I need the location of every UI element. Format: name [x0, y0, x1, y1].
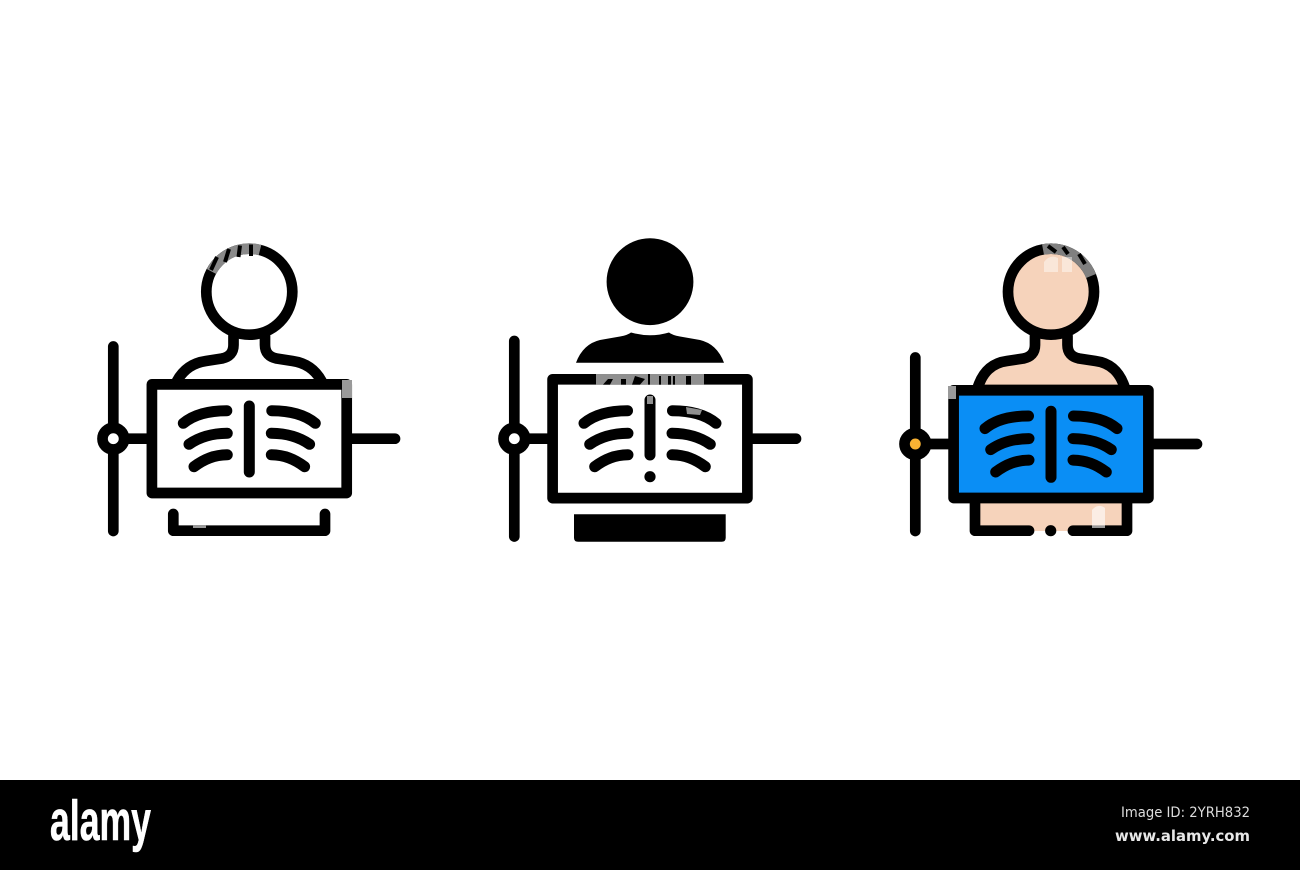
x-ray screen [954, 390, 1148, 498]
vertical stand pole [108, 346, 119, 531]
ribs and spine [183, 406, 315, 472]
icon: coloured x-ray patient [904, 246, 1197, 536]
lower body bracket [173, 514, 325, 531]
website: www.alamy.com [1115, 827, 1250, 845]
head silhouette [607, 238, 693, 325]
watermark fragments [193, 244, 352, 528]
vertical stand pole [509, 341, 520, 536]
stand connector arms [525, 433, 796, 444]
shoulders and neck [977, 336, 1126, 390]
ribs and spine [985, 411, 1117, 477]
alamy logo: alamy [50, 789, 151, 853]
shoulders silhouette [576, 332, 724, 363]
lower body block [574, 514, 726, 542]
shoulders outline [177, 336, 322, 381]
x-ray screen [553, 379, 747, 498]
ribs and spine [584, 400, 716, 467]
stand joint [102, 428, 124, 450]
footer bar [0, 780, 1300, 870]
vertical stand pole [910, 358, 921, 531]
stand connector arms [124, 433, 395, 444]
lower body outline [975, 503, 1127, 531]
lower body fill [975, 500, 1127, 531]
watermark fragments [596, 374, 704, 415]
icon: outline x-ray patient [102, 244, 395, 531]
watermark fragments [948, 246, 1105, 528]
stand joint [504, 428, 525, 450]
head [1008, 249, 1094, 335]
stand joint [904, 433, 926, 455]
x-ray screen [152, 384, 347, 493]
stand connector arms [926, 439, 1197, 449]
icon: solid x-ray patient [504, 238, 796, 542]
image id: Image ID: 2YRH832 [1121, 805, 1250, 821]
spine dot [644, 471, 656, 482]
head outline [206, 249, 292, 335]
navel dot [1045, 525, 1056, 536]
